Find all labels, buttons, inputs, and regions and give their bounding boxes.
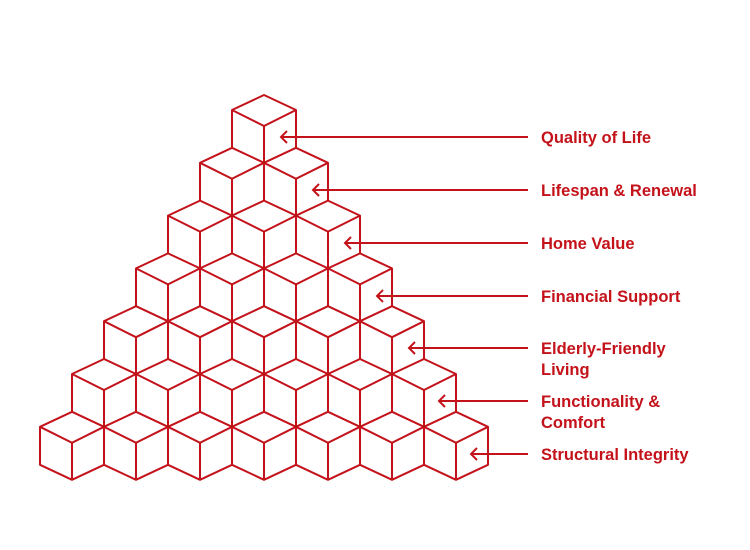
label: functionality & comfort: Functionality & xyxy=(541,393,660,411)
label: functionality & comfort: Comfort xyxy=(541,414,606,432)
label: elderly-friendly living: Elderly-Friendly xyxy=(541,340,666,358)
label: lifespan: Lifespan & Renewal xyxy=(541,182,697,200)
arrow: financial support xyxy=(377,290,528,302)
arrow: structural integrity xyxy=(471,448,528,460)
label: elderly-friendly living: Living xyxy=(541,361,590,379)
label: financial support: Financial Support xyxy=(541,288,681,306)
arrow: home value xyxy=(345,237,528,249)
label: structural integrity: Structural Integrity xyxy=(541,446,689,464)
arrow: elderly-friendly xyxy=(409,342,528,354)
arrow: lifespan xyxy=(313,184,528,196)
cube pyramid xyxy=(40,95,488,480)
arrow: quality of life xyxy=(281,131,528,143)
label: home value: Home Value xyxy=(541,235,635,253)
label: quality of life: Quality of Life xyxy=(541,129,651,147)
arrow: functionality xyxy=(439,395,528,407)
